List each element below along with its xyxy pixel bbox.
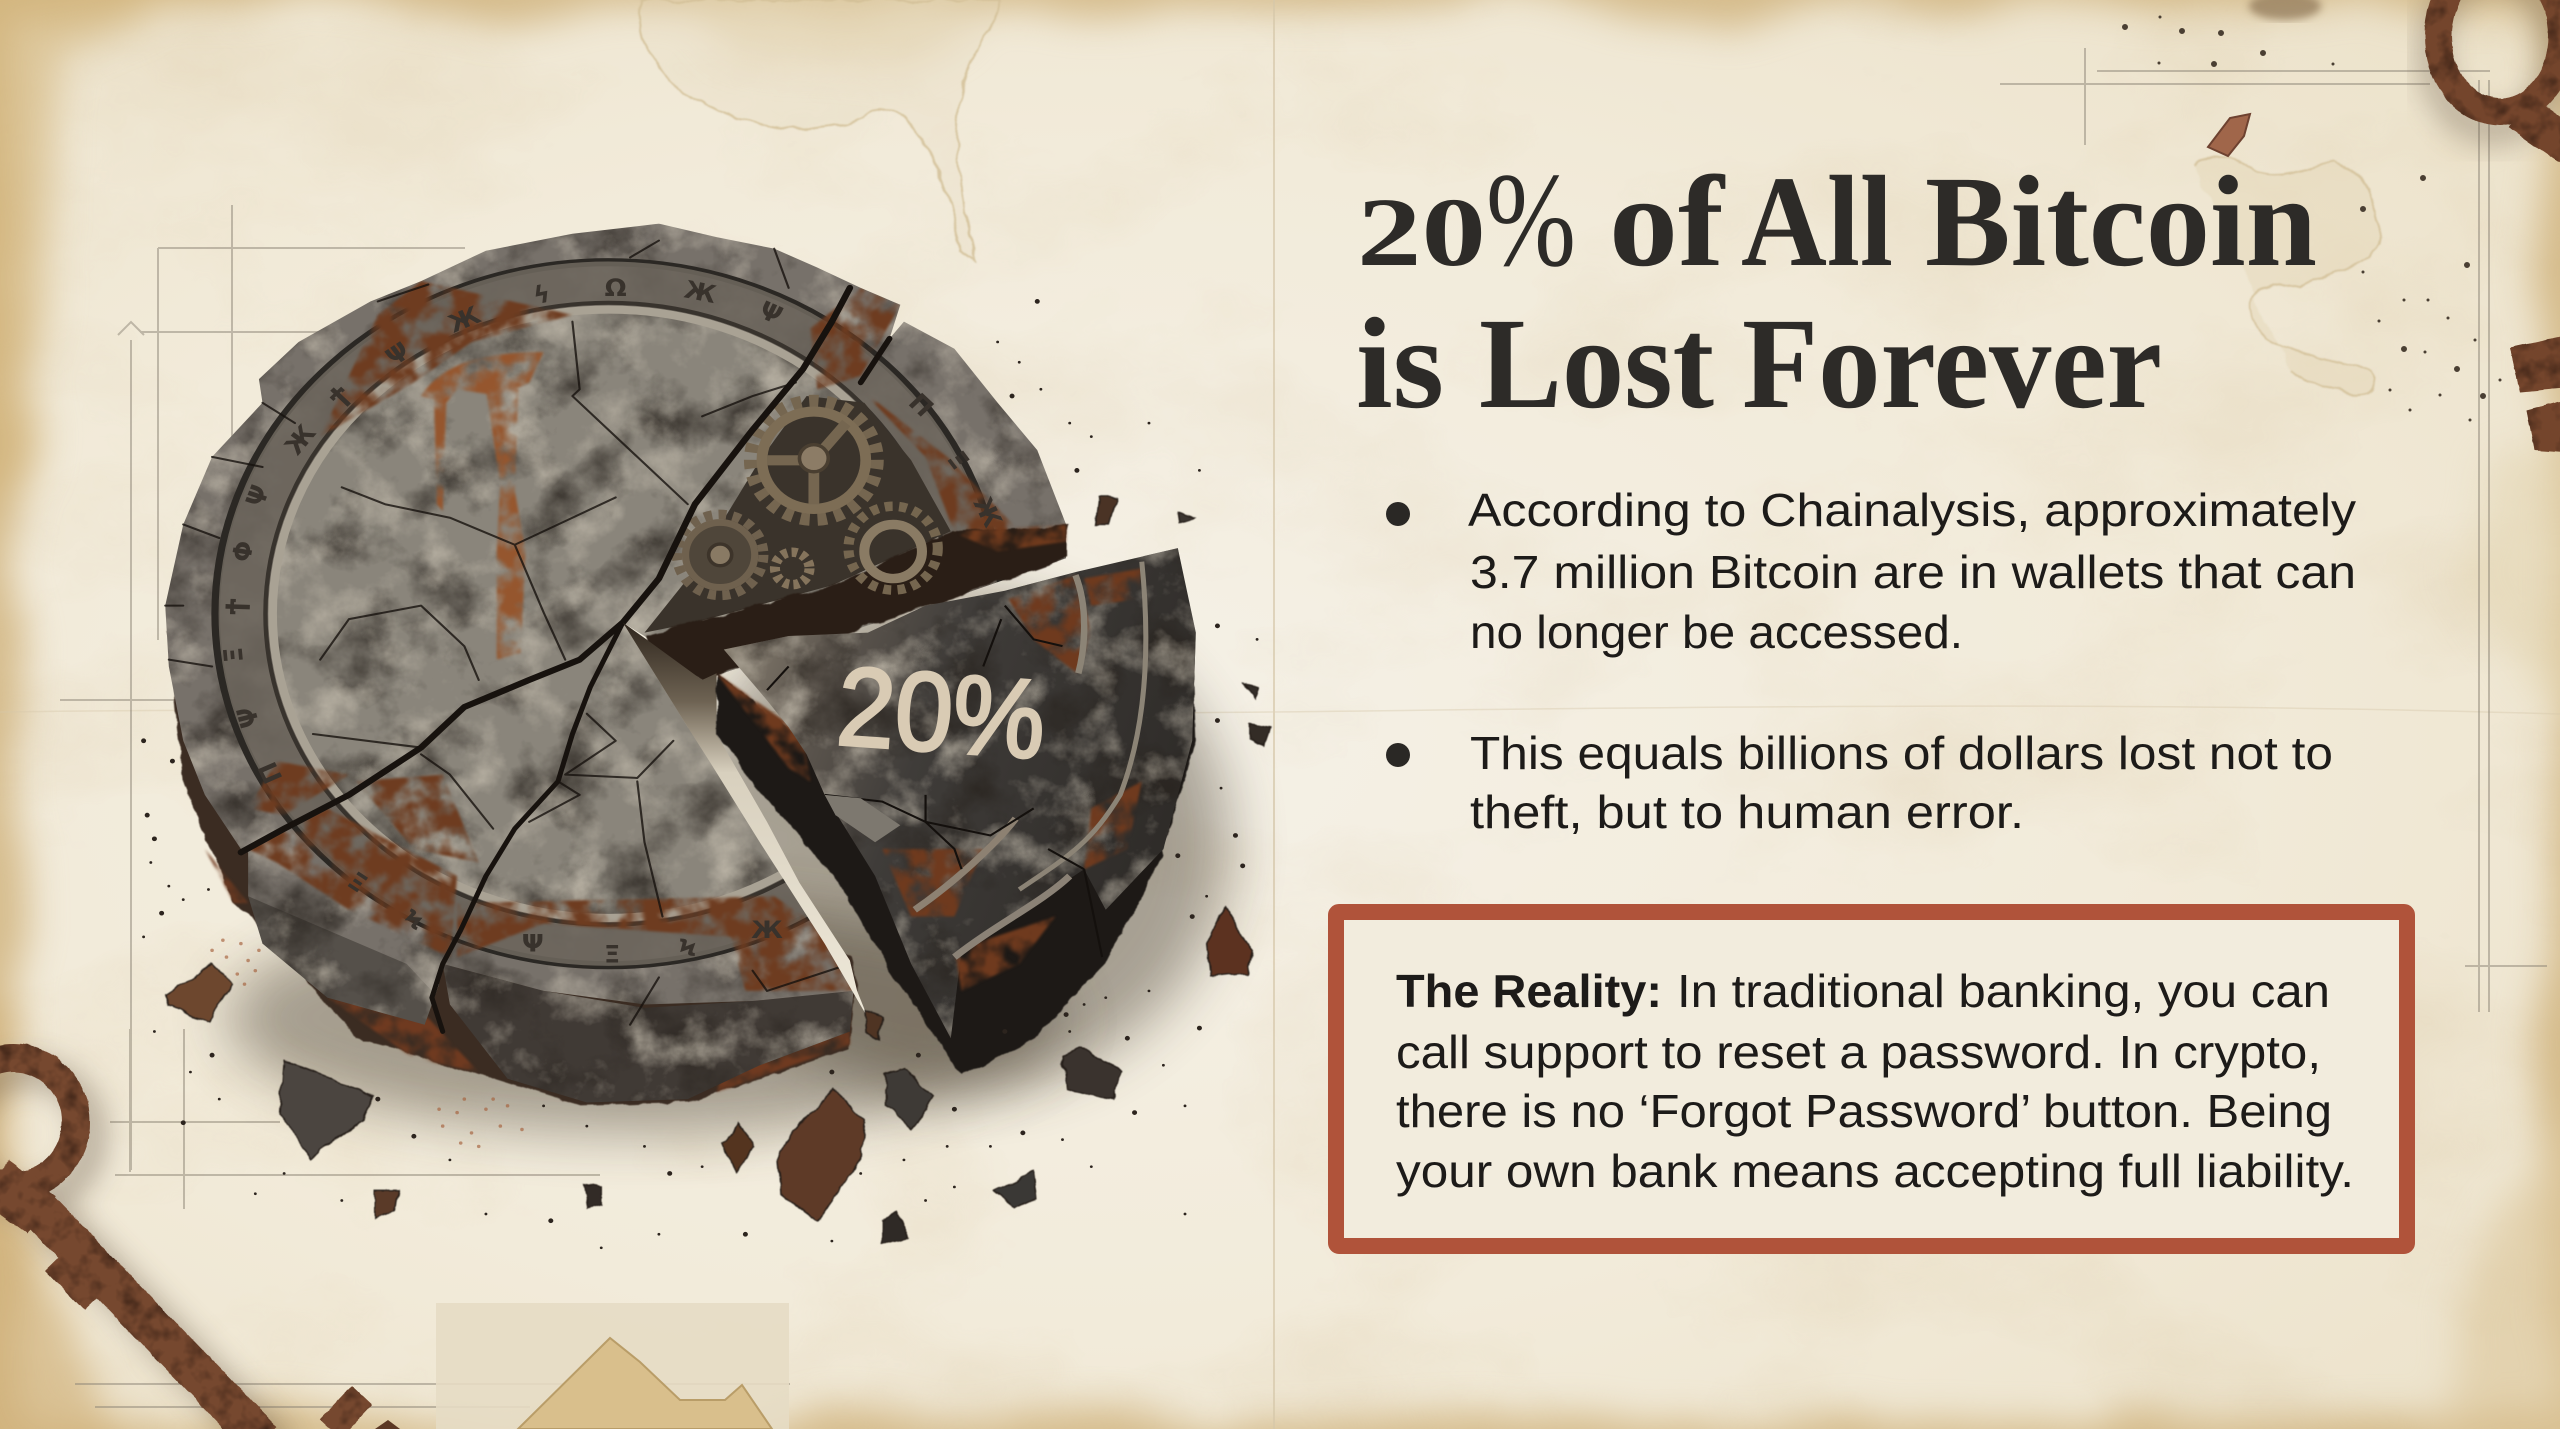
bullet marker [1386, 743, 1410, 767]
gap between disc and wedge [623, 622, 868, 1018]
wedge ring lines [915, 562, 1146, 957]
key tooth [375, 1420, 400, 1429]
large gear [750, 401, 877, 520]
callout: The Reality: there is no ‘Forgot Password’ button. Being [1396, 1085, 2332, 1137]
ring glyphs: Ж [967, 493, 1008, 532]
debris rocks [165, 497, 1270, 1244]
gear chamber [644, 396, 1066, 680]
disc side wall [167, 633, 857, 1106]
ring glyphs: Φ [226, 539, 260, 564]
ring glyphs: Ж [682, 275, 719, 309]
ring glyphs: Ω [605, 274, 627, 302]
title: is [1356, 292, 1444, 436]
bullet point 1: According to Chainalysis, approximately [1468, 484, 2356, 536]
ring glyphs: Ξ [941, 446, 975, 475]
bullet point 2: theft, but to human error. [1470, 786, 2024, 838]
side wall rust [205, 849, 850, 1092]
bottom beige paper square [436, 1303, 789, 1429]
ring glyphs: Ϯ [322, 380, 356, 411]
ring glyphs: Ψ [380, 337, 416, 372]
ring glyphs: Π [903, 388, 939, 422]
bullet point 2: This equals billions of dollars lost not to [1470, 727, 2333, 779]
callout: The Reality: The Reality: [1396, 965, 1662, 1017]
ring glyphs [218, 274, 1008, 968]
wedge rust patches [882, 568, 1142, 991]
title: % [1486, 146, 1576, 295]
title: Forever [1742, 292, 2162, 436]
cracks [165, 241, 890, 1031]
ring glyphs: Ϟ [399, 902, 428, 935]
wedge top surface [724, 548, 1196, 1038]
detached 20% wedge [717, 548, 1196, 1075]
icon: rusty key top-right [2432, 0, 2560, 452]
ring glyphs: Ξ [343, 865, 374, 897]
bullet marker [1386, 502, 1410, 526]
wedge rust side [717, 673, 810, 781]
water stains [638, 0, 2380, 395]
ring glyphs: Ж [751, 916, 783, 944]
engraved ring band [216, 262, 1001, 965]
ring glyphs: Ϟ [679, 934, 697, 962]
small gear left [677, 514, 763, 595]
ring glyphs: ϟ [530, 279, 553, 310]
callout: The Reality [1336, 912, 2407, 1246]
callout: The Reality: your own bank means accepting full liability. [1396, 1145, 2354, 1197]
bullet point 1 [1386, 484, 2356, 658]
ring glyphs: Ψ [522, 929, 544, 958]
icon: rusty key bottom-left [0, 1058, 400, 1429]
stone lower block faces [248, 896, 439, 1025]
ring glyphs: Ψ [231, 704, 266, 731]
ring glyphs: Ψ [240, 481, 276, 510]
ring glyphs: Ξ [218, 646, 249, 664]
title: Bitcoin [1925, 150, 2317, 294]
ring glyphs: Ж [279, 419, 322, 460]
bottom torn paper scrap [518, 1338, 772, 1429]
20% label on wedge: 20% [833, 643, 1050, 782]
inner plate [275, 312, 941, 915]
scattered dark grit [144, 301, 1257, 1248]
illustration: shattered stone pie chart [118, 174, 1270, 1248]
broken wall below chamber [644, 524, 1066, 680]
disc top face [165, 224, 1066, 1004]
key teeth [2510, 336, 2560, 392]
tiny gear [775, 552, 810, 585]
half gear right [848, 506, 938, 590]
callout: The Reality: In traditional banking, you can [1677, 965, 2330, 1017]
bullet point 1: no longer be accessed. [1470, 606, 1963, 658]
rust patches on the ring [248, 281, 1026, 991]
rust streaks on the plate [421, 352, 544, 660]
rust shard near title [2208, 114, 2250, 156]
ring glyphs: Ψ [754, 296, 787, 330]
title: of [1609, 150, 1726, 294]
bullet point 1: 3.7 million Bitcoin are in wallets that can [1470, 546, 2356, 598]
wedge light shard [825, 795, 900, 842]
ring glyphs: Ж [444, 301, 485, 338]
brown dust top edge [2249, 0, 2321, 20]
rust dust [212, 940, 522, 1146]
title: 20 [1357, 179, 1486, 287]
bullet point 2 [1386, 727, 2333, 838]
wedge cracks [767, 606, 1102, 957]
ring glyphs: Ϯ [220, 598, 251, 615]
ring glyphs: Π [252, 758, 289, 788]
title [1356, 146, 2317, 436]
title: Lost [1479, 292, 1714, 436]
callout: The Reality: call support to reset a password. In crypto, [1396, 1026, 2321, 1078]
ring glyphs: Ξ [604, 940, 620, 968]
title: All [1741, 150, 1893, 294]
wedge side wall [717, 633, 1196, 1075]
shadow under the disc [226, 592, 1228, 1133]
scattered grit top-right [2125, 17, 2500, 420]
